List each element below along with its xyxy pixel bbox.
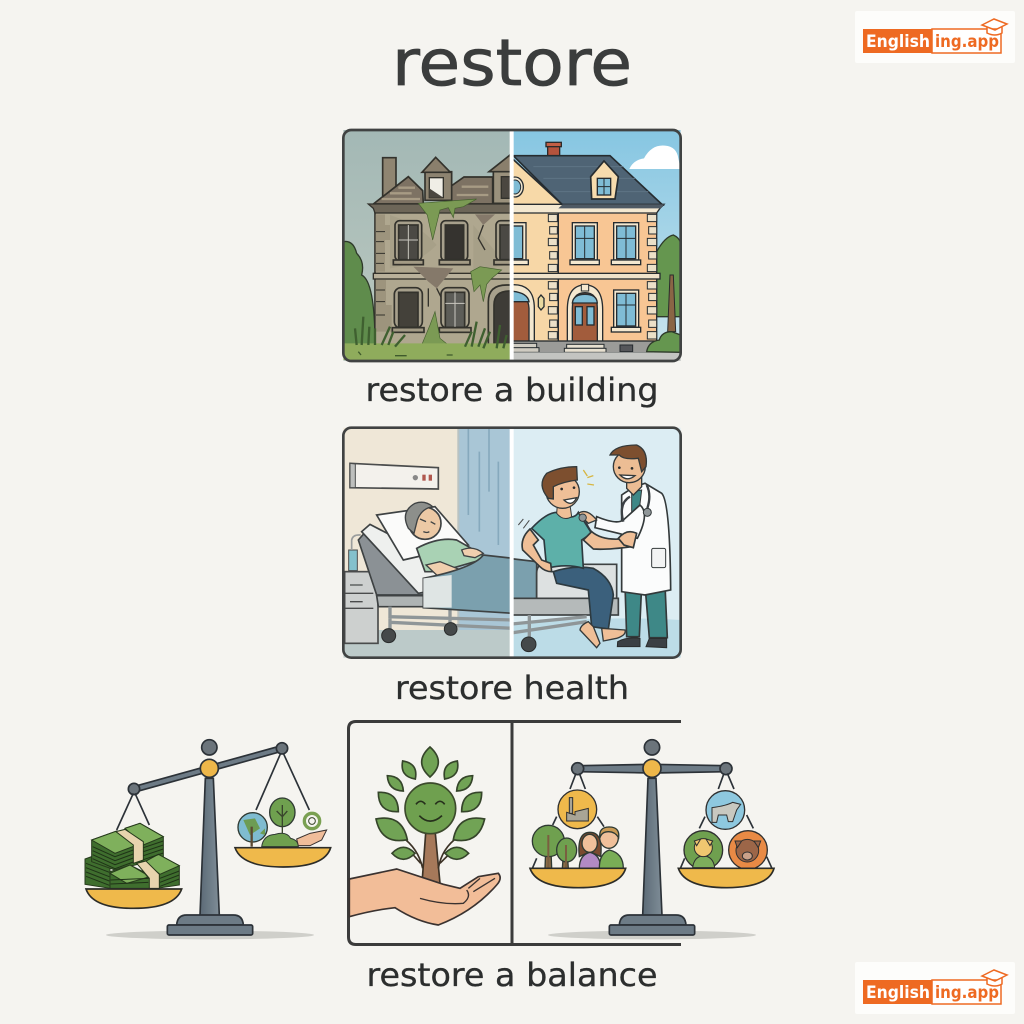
trunk and branches bbox=[422, 833, 440, 883]
title: restore bbox=[392, 27, 632, 101]
scale post and base bbox=[572, 740, 732, 935]
patient bbox=[553, 567, 613, 629]
shadow bbox=[106, 931, 314, 939]
cat badge bbox=[684, 831, 723, 869]
panel: restore a building bbox=[343, 130, 682, 361]
divider bbox=[510, 428, 514, 658]
nature items bbox=[238, 813, 267, 842]
pillow bbox=[377, 507, 468, 560]
divider bbox=[510, 130, 514, 361]
windows upper and lower bbox=[392, 220, 510, 344]
bedside table bbox=[345, 572, 378, 643]
doctor bbox=[625, 585, 667, 638]
cow badge bbox=[706, 791, 745, 829]
logo: bottom right: ing.app bbox=[935, 983, 999, 1003]
left half: ruined house bbox=[343, 130, 517, 361]
restored windows bbox=[508, 223, 641, 344]
shadow bbox=[548, 931, 756, 939]
grass bbox=[343, 343, 510, 360]
panel: restore a balance frame bbox=[348, 722, 681, 944]
trees and family bbox=[532, 825, 623, 868]
wall unit bbox=[350, 463, 438, 489]
frame bbox=[343, 428, 681, 658]
logo: top right: ing.app bbox=[935, 32, 999, 52]
scale: money outweighs nature bbox=[85, 740, 331, 939]
factory badge bbox=[558, 790, 597, 829]
caption: restore health: restore health bbox=[395, 669, 629, 707]
panel: restore health bbox=[343, 428, 681, 658]
hand bbox=[349, 869, 500, 925]
money stacks bbox=[85, 823, 179, 888]
left half: patient in bed bbox=[343, 428, 513, 658]
scale: restored balance bbox=[530, 740, 774, 939]
left pan bbox=[86, 889, 182, 908]
right half: recovered patient and doctor bbox=[508, 428, 681, 658]
smiling crown bbox=[405, 783, 456, 834]
foundation and ground bbox=[508, 341, 660, 353]
caption: restore a building: restore a building bbox=[366, 371, 658, 409]
vines bbox=[418, 199, 502, 349]
logo: top right bbox=[855, 11, 1015, 63]
frame bbox=[343, 130, 681, 361]
right pan bbox=[235, 848, 331, 867]
logo: bottom right: English bbox=[866, 983, 930, 1003]
blanket bbox=[423, 555, 513, 613]
leaves bbox=[376, 747, 485, 859]
pans bbox=[530, 868, 626, 888]
quoins bbox=[548, 214, 657, 339]
bed bbox=[514, 558, 538, 598]
patient bbox=[417, 539, 487, 572]
right half: restored house bbox=[507, 130, 682, 361]
caption: restore a balance: restore a balance bbox=[366, 956, 658, 994]
scale post and base bbox=[128, 740, 288, 935]
logo: top right: English bbox=[866, 32, 930, 52]
icon: smiling tree in open hand bbox=[349, 747, 500, 925]
logo: bottom right bbox=[855, 962, 1015, 1014]
bed frame bbox=[357, 534, 422, 596]
pig badge bbox=[729, 831, 767, 869]
